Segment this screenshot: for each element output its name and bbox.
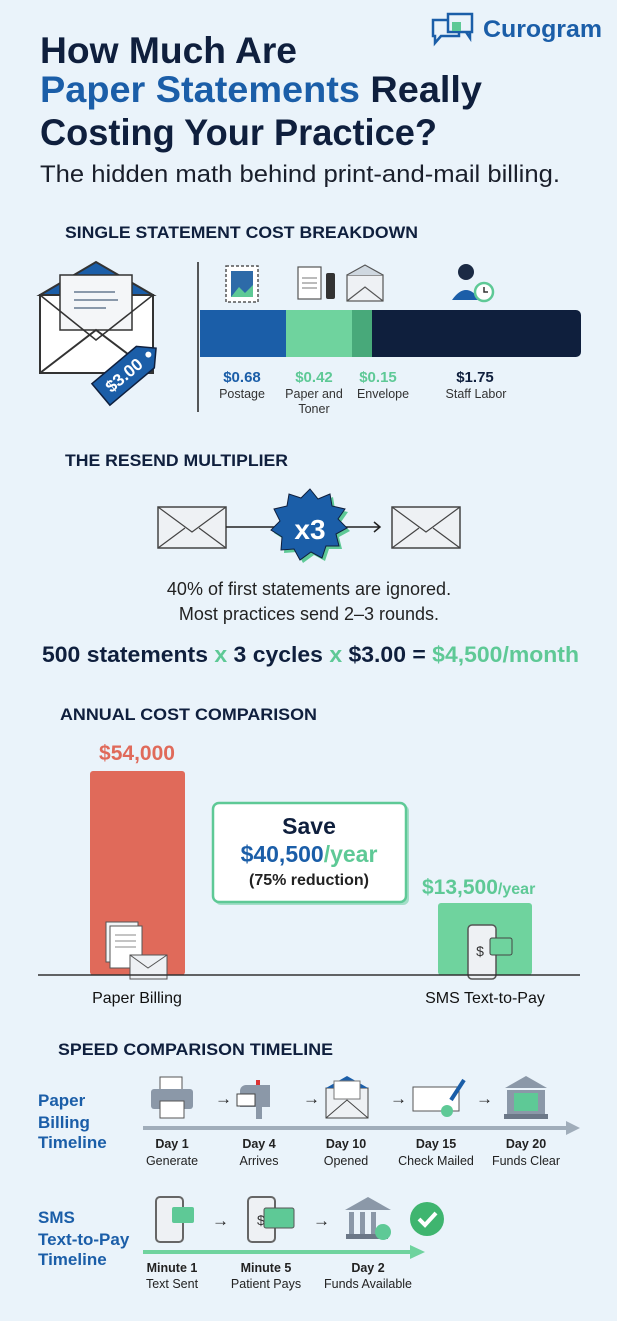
heading: resend multiplier: THE RESEND MULTIPLIER — [65, 451, 288, 470]
bar chart: $13,500/year — [422, 876, 535, 899]
paper billing timeline — [38, 1076, 580, 1168]
heading: annual cost comparison: ANNUAL COST COMPARISON — [60, 705, 317, 724]
resend text: Most practices send 2–3 rounds. — [179, 604, 439, 624]
cost labels: Paper and — [285, 387, 343, 401]
icon: chat bubbles — [433, 14, 472, 43]
paper billing timeline: Timeline — [38, 1133, 107, 1152]
cost icons — [226, 264, 493, 302]
heading: speed comparison timeline: SPEED COMPARISON TIMELINE — [58, 1040, 333, 1059]
icon: bank with check — [345, 1197, 391, 1240]
icon: phone with card: $ — [257, 1212, 265, 1228]
heading: single statement cost breakdown: SINGLE STATEMENT COST BREAKDOWN — [65, 223, 418, 242]
title: Costing Your Practice? — [40, 112, 437, 153]
cost labels: $0.15 — [359, 369, 397, 386]
sms timeline: SMS — [38, 1208, 75, 1227]
sms timeline: → — [313, 1211, 330, 1230]
logo: Curogram — [483, 16, 602, 43]
icon: phone with chat — [156, 1197, 194, 1242]
stacked cost bar — [200, 310, 581, 357]
bar chart: $54,000 — [99, 742, 175, 765]
sms timeline: Timeline — [38, 1250, 107, 1269]
cost labels: Envelope — [357, 387, 409, 401]
sms timeline: Minute 5 — [241, 1261, 291, 1275]
callout: savings — [213, 803, 409, 905]
cost labels: Staff Labor — [446, 387, 506, 401]
paper billing timeline: Day 1 — [155, 1137, 189, 1151]
paper billing timeline: Day 20 — [506, 1137, 546, 1151]
icon: bank — [504, 1076, 548, 1119]
resend text — [167, 579, 451, 624]
equation: 500 statements x 3 cycles x $3.00 = $4,500/month — [42, 642, 579, 667]
icon: envelope with $3.00 tag: $3.00 — [102, 355, 147, 396]
paper billing timeline: Check Mailed — [398, 1154, 474, 1168]
icon: printer — [151, 1077, 193, 1118]
cost labels: $1.75 — [456, 369, 494, 386]
cost labels — [219, 369, 506, 416]
paper billing timeline: → — [303, 1089, 320, 1108]
sms timeline: Patient Pays — [231, 1277, 301, 1291]
cost labels: $0.68 — [223, 369, 261, 386]
sms timeline: → — [212, 1211, 229, 1230]
title: Paper Statements Really — [40, 69, 482, 110]
cost labels: Postage — [219, 387, 265, 401]
bar chart: SMS Text-to-Pay — [425, 990, 545, 1007]
paper billing timeline: Paper — [38, 1091, 86, 1110]
sms timeline: Minute 1 — [147, 1261, 197, 1275]
paper billing timeline: → — [476, 1089, 493, 1108]
paper billing timeline: → — [215, 1089, 232, 1108]
resend diagram — [158, 489, 460, 563]
paper billing timeline: Arrives — [240, 1154, 278, 1168]
paper billing timeline: Funds Clear — [492, 1154, 560, 1168]
icon: phone with card — [248, 1197, 294, 1242]
title — [40, 30, 482, 153]
bar chart: $ — [476, 943, 484, 959]
bar chart — [38, 742, 580, 1007]
paper billing timeline: Billing — [38, 1113, 90, 1132]
title: How Much Are — [40, 30, 297, 71]
paper billing timeline: Day 4 — [242, 1137, 276, 1151]
resend diagram: x3 — [294, 514, 326, 545]
cost labels: $0.42 — [295, 369, 333, 386]
icon: open envelope — [326, 1076, 368, 1118]
paper billing timeline: → — [390, 1089, 407, 1108]
callout: savings: (75% reduction) — [249, 872, 369, 889]
paper billing timeline: Day 10 — [326, 1137, 366, 1151]
icon: check — [413, 1080, 464, 1117]
paper billing timeline: Generate — [146, 1154, 198, 1168]
subtitle: The hidden math behind print-and-mail billing. — [40, 161, 560, 188]
callout: savings: Save — [282, 813, 336, 839]
paper billing timeline: Day 15 — [416, 1137, 456, 1151]
bar chart: Paper Billing — [92, 990, 182, 1007]
logo — [433, 14, 602, 43]
sms timeline — [38, 1197, 444, 1291]
sms timeline: Funds Available — [324, 1277, 412, 1291]
sms timeline: Text Sent — [146, 1277, 199, 1291]
icon: mailbox — [237, 1080, 270, 1119]
cost labels: Toner — [298, 402, 330, 416]
icon: check circle — [410, 1202, 444, 1236]
paper billing timeline: Opened — [324, 1154, 368, 1168]
icon: envelope with $3.00 tag — [40, 262, 165, 405]
callout: savings: $40,500/year — [241, 841, 377, 867]
resend text: 40% of first statements are ignored. — [167, 579, 451, 599]
sms timeline: Day 2 — [351, 1261, 385, 1275]
sms timeline: Text-to-Pay — [38, 1230, 130, 1249]
